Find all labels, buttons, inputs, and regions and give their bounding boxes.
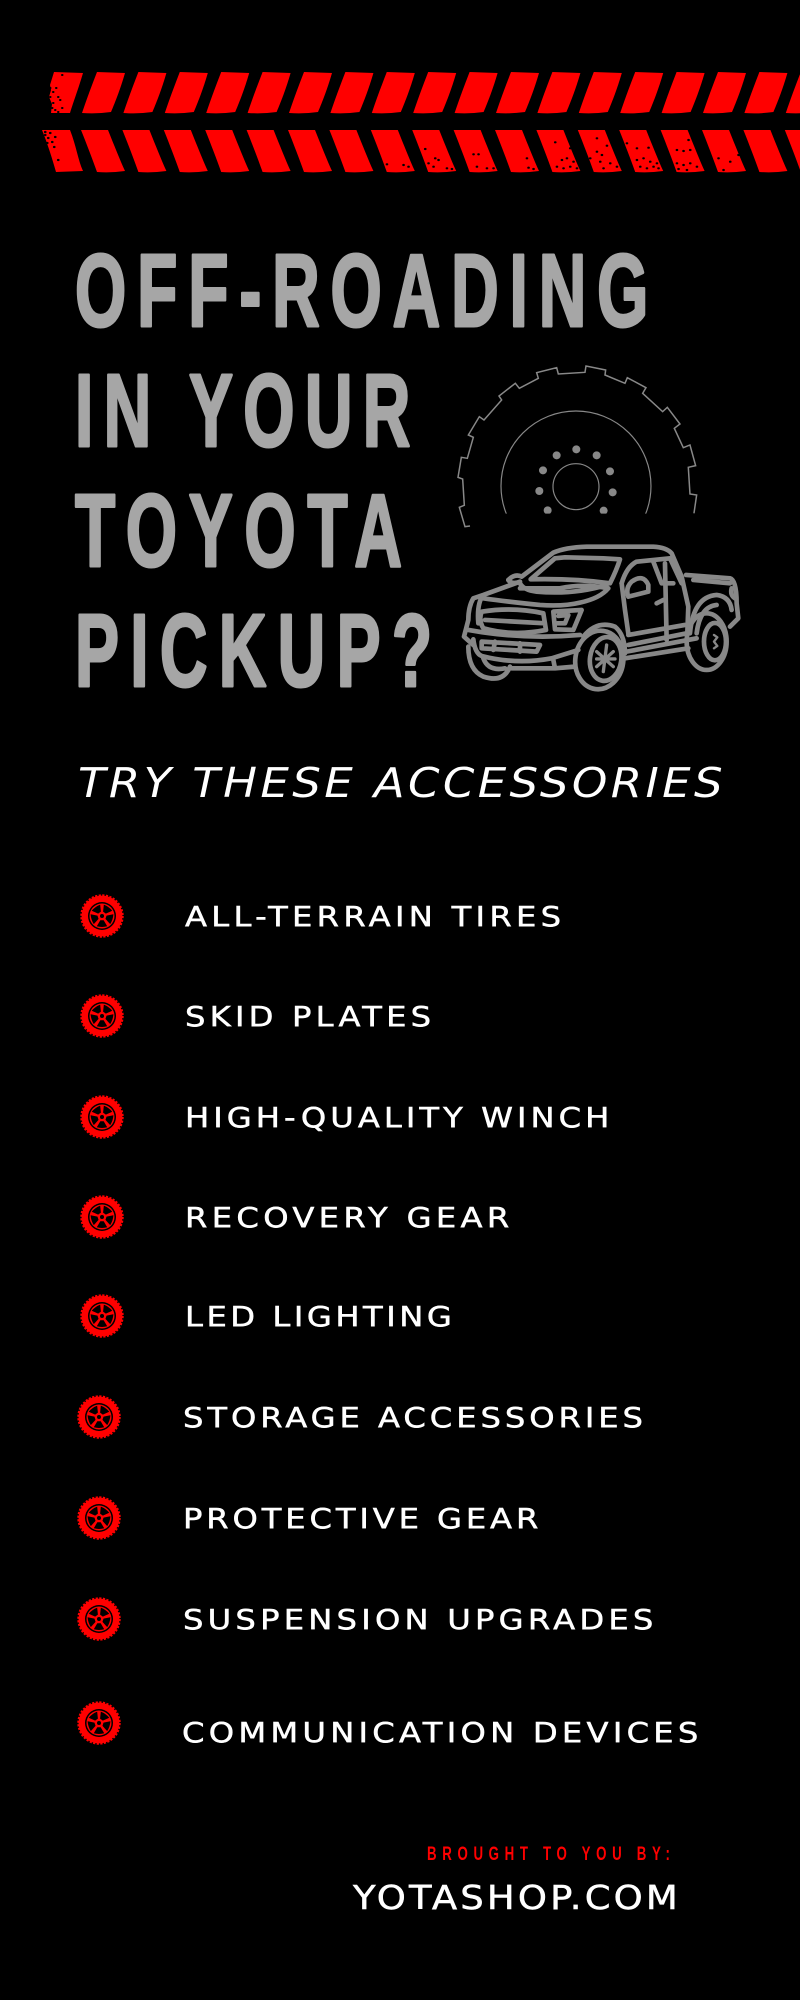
list item: all-terrain tires: ALL-TERRAIN TIRES xyxy=(185,901,561,933)
footer: website: YOTASHOP.COM xyxy=(352,1879,678,1917)
list item: skid plates: SKID PLATES xyxy=(185,1001,431,1033)
list item: storage accessories xyxy=(78,1396,643,1438)
icon: pickup truck xyxy=(464,547,738,692)
list item: led lighting xyxy=(81,1295,452,1337)
list item: all-terrain tires xyxy=(81,895,561,937)
icon: tire outline xyxy=(457,365,698,528)
list item: suspension upgrades xyxy=(78,1598,653,1640)
list item: high-quality winch xyxy=(81,1096,609,1138)
subtitle: TRY THESE ACCESSORIES xyxy=(78,760,723,807)
title line 3: TOYOTA xyxy=(75,474,402,589)
list item: skid plates xyxy=(81,995,431,1037)
title line 4: PICKUP? xyxy=(75,594,432,709)
list item: protective gear xyxy=(78,1497,538,1539)
list xyxy=(78,895,698,1749)
title line 1: OFF-ROADING xyxy=(75,234,648,349)
tire tracks bottom row xyxy=(42,130,800,172)
list item: communication devices: COMMUNICATION DEVICES xyxy=(182,1717,698,1749)
list item: storage accessories: STORAGE ACCESSORIES xyxy=(183,1402,643,1434)
list item: protective gear: PROTECTIVE GEAR xyxy=(183,1503,538,1535)
list item: recovery gear xyxy=(81,1196,509,1238)
tire tracks top row xyxy=(49,72,800,113)
title xyxy=(75,234,648,709)
list item: high-quality winch: HIGH-QUALITY WINCH xyxy=(185,1102,609,1134)
title line 2: IN YOUR xyxy=(75,354,410,469)
footer: brought to you by: BROUGHT TO YOU BY: xyxy=(427,1844,670,1865)
list item: recovery gear: RECOVERY GEAR xyxy=(185,1202,509,1234)
list item: led lighting: LED LIGHTING xyxy=(185,1301,452,1333)
list item: communication devices xyxy=(78,1702,698,1749)
list item: suspension upgrades: SUSPENSION UPGRADES xyxy=(183,1604,653,1636)
